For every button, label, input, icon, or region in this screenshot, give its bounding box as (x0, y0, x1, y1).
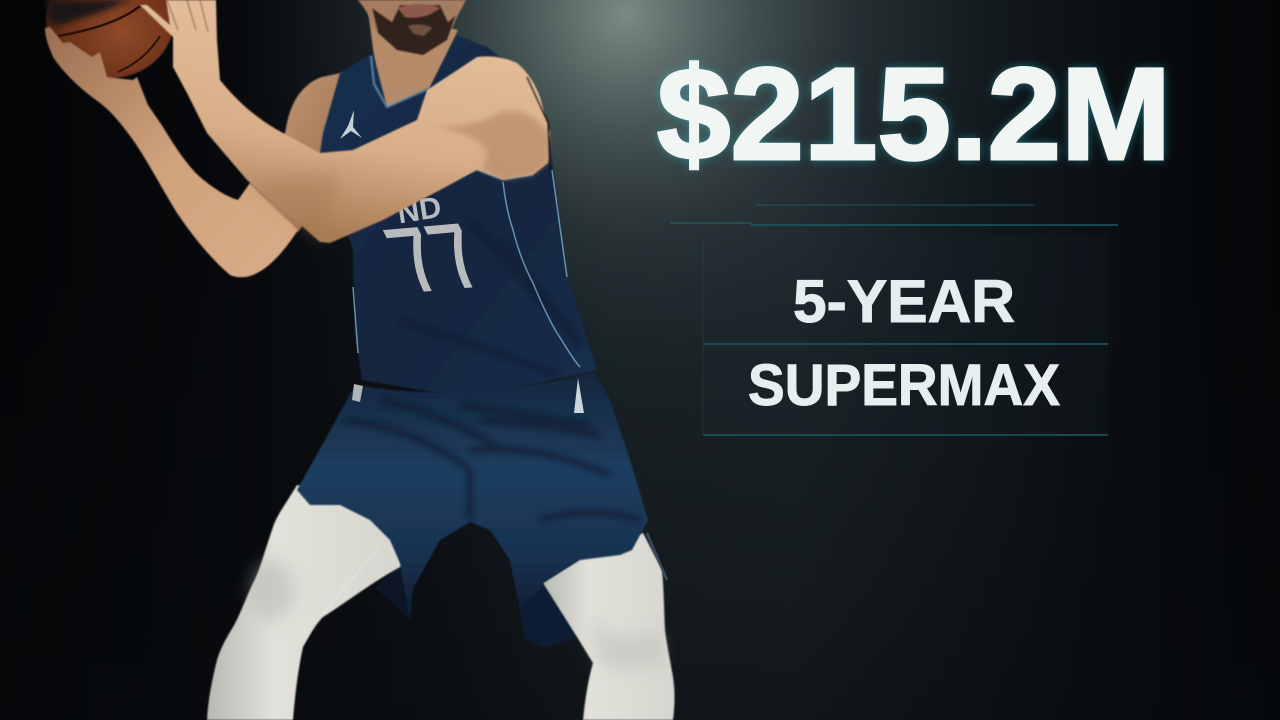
rear shoulder (250, 72, 346, 232)
panel background (703, 235, 1108, 435)
player figure (45, 0, 674, 720)
shorts details (352, 378, 667, 580)
shorts wrinkles (345, 400, 640, 520)
front arm and hand (140, 0, 550, 243)
head: face and beard (358, 0, 466, 55)
rear arm and hand (45, 27, 298, 277)
jersey number 77: 77 (370, 205, 502, 311)
jersey piping (353, 170, 580, 367)
jersey lettering: ND (395, 191, 444, 230)
label: supermax: SUPERMAX (748, 353, 1060, 418)
headline value: $215.2M (657, 40, 1171, 187)
label: 5-year: 5-YEAR (793, 268, 1015, 335)
leg: right (543, 533, 674, 720)
shorts back panel behind legs (376, 522, 590, 648)
jersey (320, 35, 597, 398)
headline value: $215.2M (656, 40, 1172, 187)
jersey wrinkles (400, 220, 580, 375)
jersey logo (340, 110, 362, 139)
basketball (46, 0, 174, 78)
leg: left (207, 485, 402, 720)
shorts (297, 372, 648, 620)
neck (368, 10, 458, 108)
stat panel (656, 40, 1172, 435)
panel rules (670, 205, 1118, 435)
